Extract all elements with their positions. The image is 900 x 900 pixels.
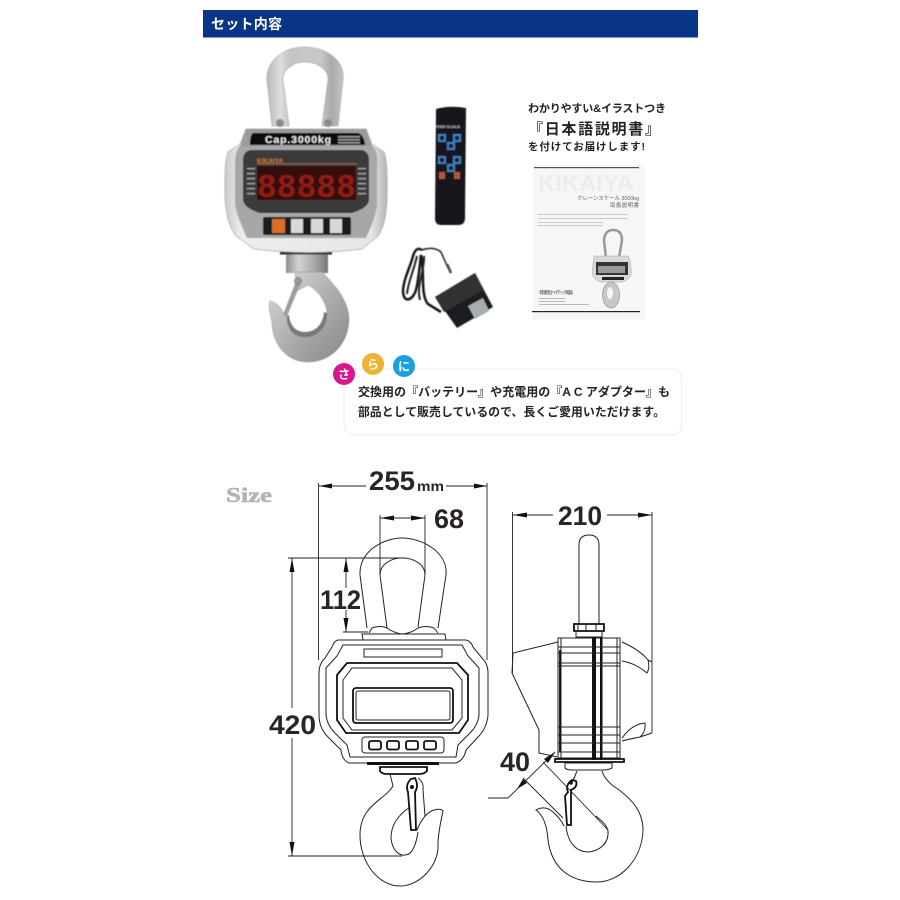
display frame — [243, 150, 369, 213]
shackle outline — [360, 538, 446, 628]
display window — [353, 688, 453, 723]
remote control: ITEM SCALE — [436, 124, 461, 129]
stem — [579, 535, 599, 624]
shackle — [267, 47, 343, 126]
badge: ni — [393, 355, 415, 377]
LED digits: 88888 — [257, 170, 356, 207]
dimension: width 255mm: mm — [417, 478, 444, 494]
dimension: depth 210 — [512, 501, 652, 733]
callout: spare parts: 部品として販売しているので、長くご愛用いただけます。 — [358, 405, 665, 419]
callout: spare parts — [333, 353, 682, 435]
right handles — [622, 642, 652, 673]
dimension: hook opening 40 — [488, 747, 608, 830]
main body — [558, 638, 620, 758]
AC adapter — [403, 248, 493, 328]
dimension: width 255mm: 255 — [369, 466, 415, 496]
manual promo text: を付けてお届けします! — [528, 140, 645, 153]
dimension: shackle opening 68: 68 — [434, 504, 464, 534]
button panel — [362, 737, 444, 753]
hook side — [565, 763, 612, 770]
dimension: inner height 112: 112 — [320, 585, 361, 615]
badge: sa: さ — [338, 368, 350, 382]
body housing — [225, 129, 387, 252]
hook collar — [286, 254, 328, 273]
instruction manual cover: 有限会社ハイテック電器 — [539, 289, 574, 296]
dimension: total height 420 — [269, 558, 402, 856]
gray display surround — [235, 146, 377, 238]
capacity label — [250, 133, 365, 145]
control buttons — [263, 217, 351, 235]
dimension: depth 210: 210 — [558, 501, 602, 531]
instruction manual cover — [532, 165, 645, 320]
dimension: hook opening 40: 40 — [500, 747, 530, 777]
badge: ni: に — [398, 360, 410, 374]
front view drawing — [319, 538, 488, 886]
header bar: set contents — [203, 10, 698, 38]
remote control — [435, 107, 466, 225]
instruction manual cover: クレーンスケール 3000kg — [577, 195, 639, 202]
side view drawing — [512, 535, 652, 882]
badge: ra — [362, 353, 384, 375]
dimension: inner height 112 — [288, 558, 405, 632]
instruction manual cover: 取扱説明書 — [610, 201, 639, 209]
instruction manual cover: KIKAIYA — [538, 170, 634, 196]
hook — [269, 272, 349, 362]
badge: sa — [333, 363, 355, 385]
housing outline — [319, 640, 488, 763]
header bar: set contents: セット内容 — [211, 16, 282, 32]
manual promo text — [528, 102, 666, 153]
manual promo text: 『日本語説明書』 — [528, 120, 660, 138]
hook outline — [360, 774, 443, 886]
product photo: crane scale: Cap.3000kg — [265, 134, 331, 146]
dimension: total height 420: 420 — [269, 710, 316, 740]
bottom collar — [367, 762, 439, 765]
callout: spare parts: 交換用の『バッテリー』や充電用の『A C アダプター』も — [358, 384, 670, 399]
rear housing — [512, 642, 558, 757]
manual promo text: わかりやすい&イラストつき — [528, 102, 666, 115]
bottom plate — [555, 759, 624, 762]
size label: Size — [226, 483, 272, 507]
dimension: shackle opening 68 — [380, 504, 464, 575]
product photo: crane scale: KIKAIYA — [257, 158, 283, 165]
dimension: width 255mm — [318, 466, 487, 660]
nut — [574, 624, 604, 631]
badge: ra: ら — [367, 358, 379, 372]
product photo: crane scale — [225, 47, 387, 362]
mini scale image — [592, 230, 631, 308]
